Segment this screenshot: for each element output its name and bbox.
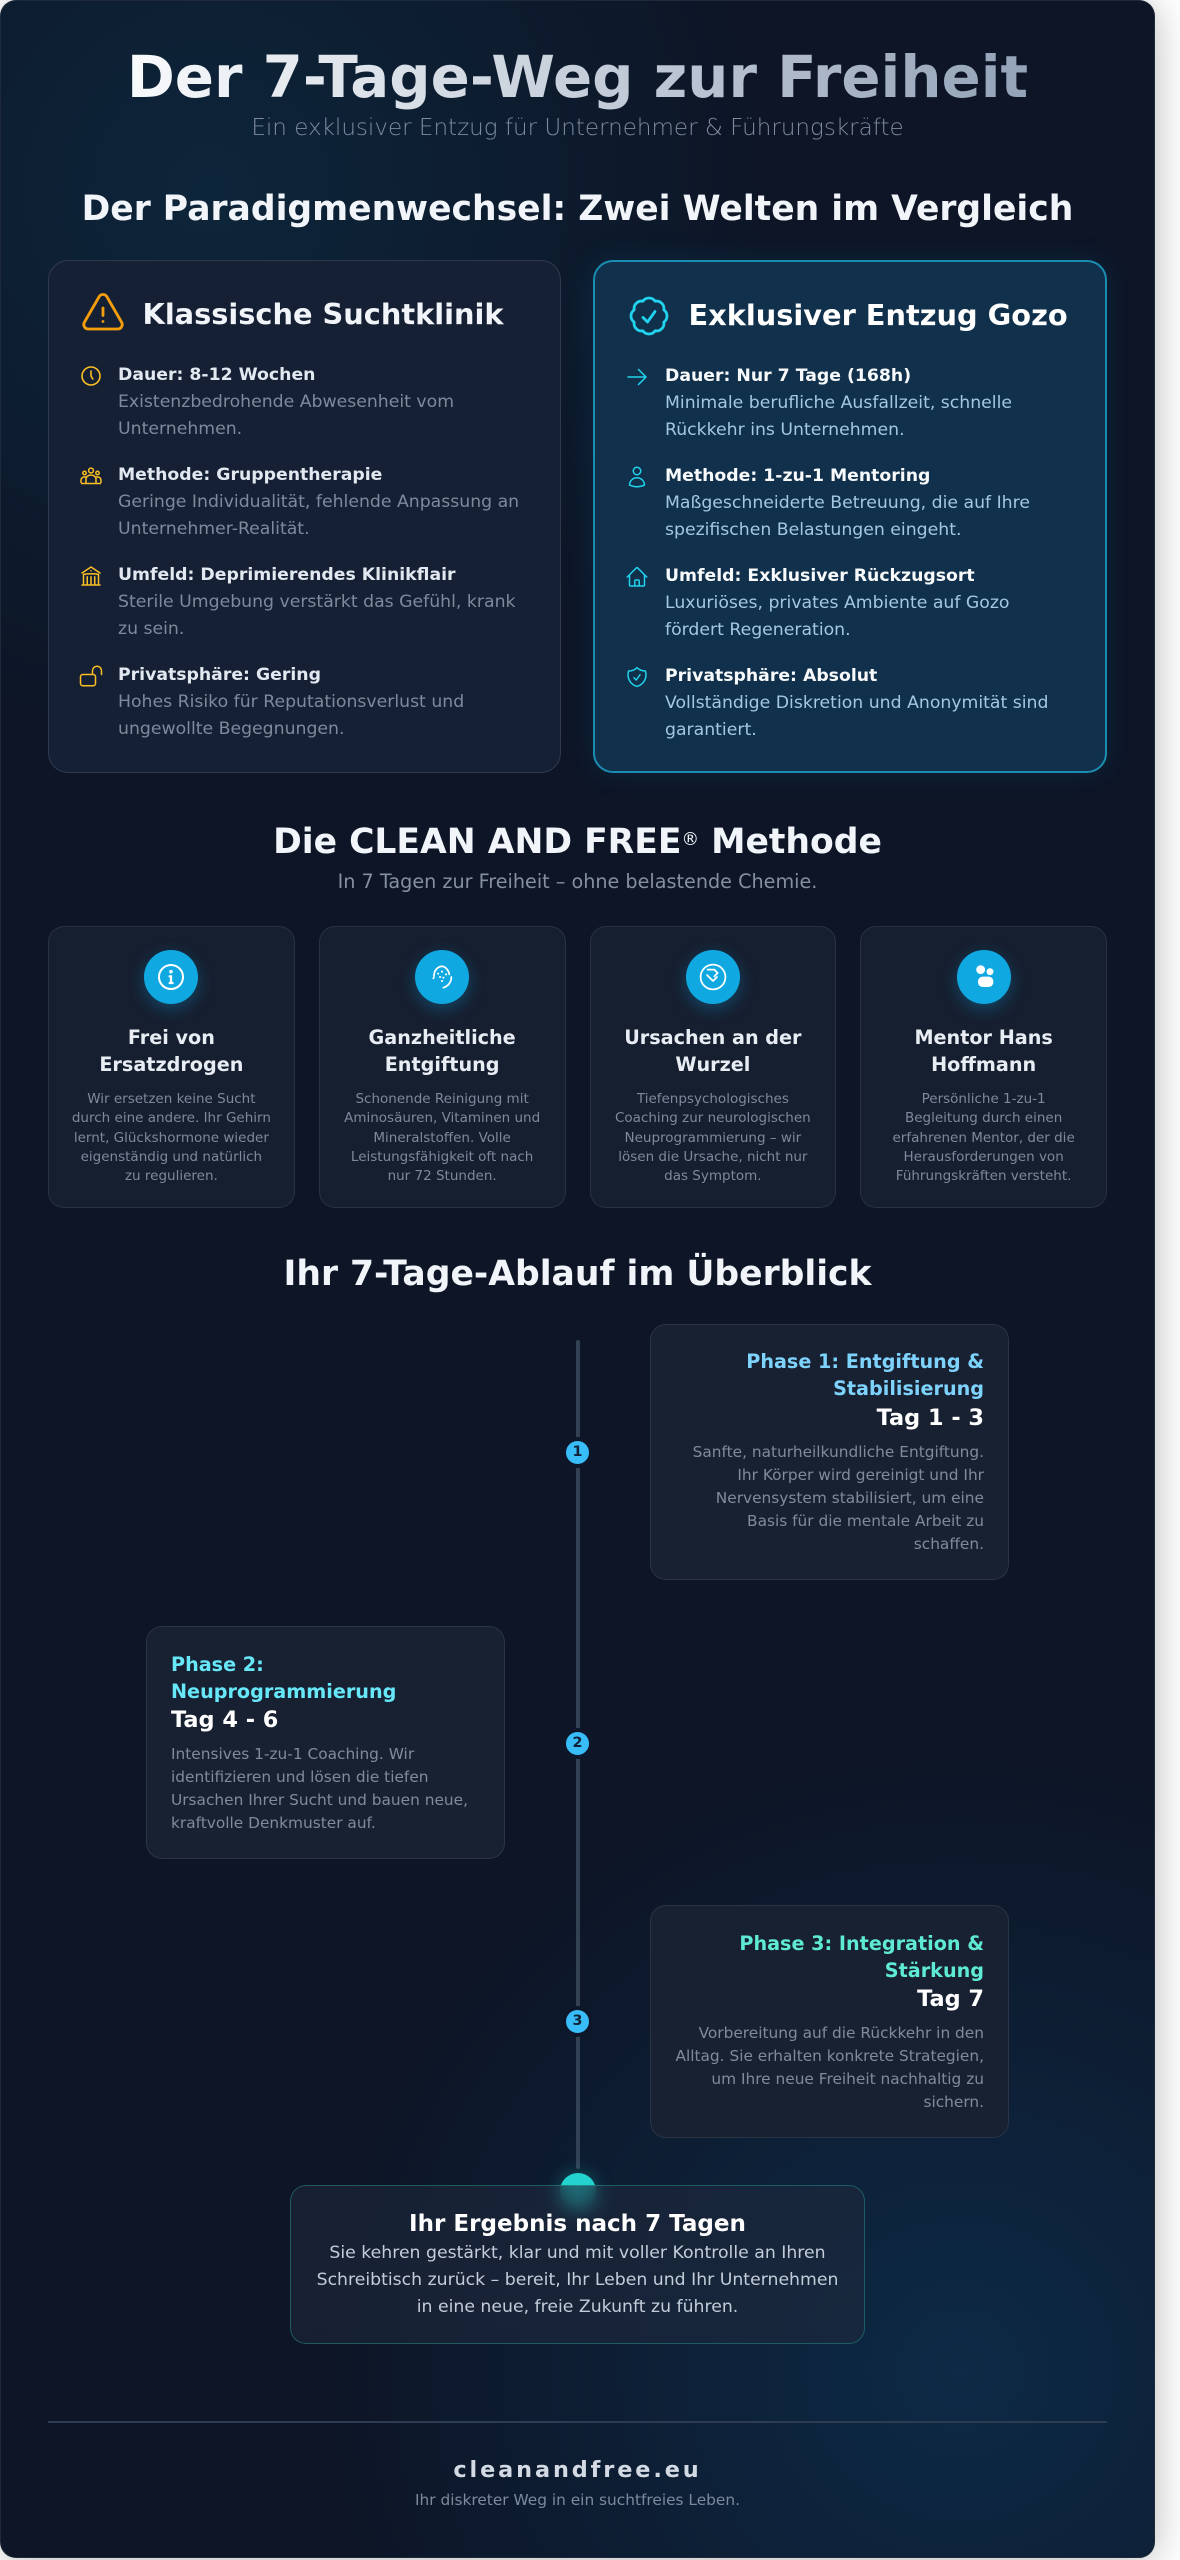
phase 2 text — [171, 1743, 468, 1835]
method text: Unternehmer-Realität. — [118, 519, 310, 539]
card: holistic detox — [319, 926, 566, 1208]
card text: Aminosäuren, Vitaminen und — [344, 1110, 540, 1126]
card title: Ursachen an der — [624, 1026, 802, 1049]
method text — [118, 465, 519, 539]
card text: eigenständig und natürlich — [81, 1149, 262, 1165]
icon: arrow in circle — [686, 950, 740, 1004]
timeline line with numbered dots — [566, 1340, 589, 2169]
dot 2: 2 — [572, 1734, 582, 1750]
item: method — [628, 466, 1030, 540]
card text: erfahrenen Mentor, der die — [892, 1130, 1075, 1146]
card text: lernt, Glückshormone wieder — [74, 1130, 269, 1146]
card text: durch eine andere. Ihr Gehirn — [72, 1110, 271, 1126]
method text — [665, 466, 1030, 540]
result circle — [560, 2173, 596, 2209]
icon: person — [628, 466, 646, 488]
duration text: Rückkehr ins Unternehmen. — [665, 420, 905, 440]
panel heading: Exklusiver Entzug Gozo — [688, 298, 1068, 332]
privacy text: Vollständige Diskretion und Anonymität sind — [665, 693, 1048, 713]
duration text: Dauer: Nur 7 Tage (168h) — [665, 366, 911, 386]
phase 3 label: Stärkung — [885, 1959, 984, 1982]
privacy text: Privatsphäre: Gering — [118, 665, 321, 685]
dot 1 — [562, 1436, 593, 1468]
card text: lösen die Ursache, nicht nur — [618, 1149, 808, 1165]
phase 1 text: Nervensystem stabilisiert, um eine — [716, 1489, 984, 1507]
subtitle: Ein exklusiver Entzug für Unternehmer & Führungskräfte — [251, 115, 904, 141]
result text: Schreibtisch zurück – bereit, Ihr Leben und Ihr Unternehmen — [317, 2270, 838, 2290]
card text — [892, 1091, 1075, 1184]
card title: Wurzel — [675, 1053, 750, 1076]
card title: Entgiftung — [385, 1053, 500, 1076]
title: Der 7-Tage-Weg zur Freiheit — [127, 43, 1028, 111]
phase 2 text: kraftvolle Denkmuster auf. — [171, 1814, 376, 1832]
privacy text: Privatsphäre: Absolut — [665, 666, 877, 686]
panel: classic clinic — [48, 260, 561, 773]
phase 2 text: Intensives 1-zu-1 Coaching. Wir — [171, 1745, 414, 1763]
phase 1 label — [746, 1350, 984, 1400]
phase 2 days: Tag 4 - 6 — [171, 1706, 278, 1732]
phase 3 text: um Ihre neue Freiheit nachhaltig zu — [711, 2070, 984, 2088]
dot 2 — [562, 1728, 593, 1758]
environment text: Umfeld: Exklusiver Rückzugsort — [665, 566, 975, 586]
phase 1 text: Basis für die mentale Arbeit zu — [747, 1512, 984, 1530]
dot 3 — [562, 2006, 593, 2036]
phase 1 text: Ihr Körper wird gereinigt und Ihr — [737, 1466, 984, 1484]
phase 3 days: Tag 7 — [917, 1986, 984, 2012]
card text: Schonende Reinigung mit — [355, 1091, 529, 1107]
card text: Wir ersetzen keine Sucht — [87, 1091, 256, 1107]
phase 1 text: schaffen. — [914, 1535, 984, 1553]
icon: open lock — [80, 666, 102, 686]
heading: timeline: Ihr 7-Tage-Ablauf im Überblick — [284, 1254, 872, 1294]
result box — [290, 2185, 865, 2344]
phase 2 label — [171, 1653, 396, 1703]
card text: Neuprogrammierung – wir — [625, 1130, 801, 1146]
heading: method: Die CLEAN AND FREE® Methode — [273, 822, 882, 862]
card text: zu regulieren. — [125, 1168, 218, 1184]
icon: house — [626, 566, 648, 587]
icon: arrow — [627, 368, 647, 386]
item: duration — [627, 366, 1012, 440]
card text: das Symptom. — [664, 1168, 762, 1184]
icon: people — [957, 950, 1011, 1004]
icon: shield — [627, 666, 647, 688]
duration text — [665, 366, 1012, 440]
environment text: fördert Regeneration. — [665, 620, 851, 640]
method text: Maßgeschneiderte Betreuung, die auf Ihre — [665, 493, 1030, 513]
card text: Persönliche 1-zu-1 — [922, 1091, 1046, 1107]
card title — [369, 1026, 516, 1076]
phase 3 text — [675, 2022, 984, 2114]
card: root causes — [590, 926, 836, 1208]
card title — [914, 1026, 1053, 1076]
privacy text: ungewollte Begegnungen. — [118, 719, 344, 739]
card title: Frei von — [128, 1026, 215, 1049]
privacy text — [118, 665, 464, 739]
card text: nur 72 Stunden. — [388, 1168, 497, 1184]
item: duration — [81, 365, 454, 439]
duration text — [118, 365, 454, 439]
card text — [72, 1091, 271, 1184]
icon: group — [80, 467, 102, 484]
item: privacy — [627, 666, 1048, 740]
card text: Mineralstoffen. Volle — [373, 1130, 511, 1146]
phase 2 text: identifizieren und lösen die tiefen — [171, 1768, 429, 1786]
phase 1 days: Tag 1 - 3 — [877, 1404, 984, 1430]
phase 1 card — [650, 1324, 1009, 1580]
vertical line — [576, 1340, 580, 2169]
phase 3 label — [739, 1930, 984, 1984]
phase 1 text — [693, 1443, 984, 1553]
result text: Sie kehren gestärkt, klar und mit voller Kontrolle an Ihren — [329, 2242, 826, 2262]
panel heading: Klassische Suchtklinik — [142, 297, 504, 331]
privacy text: garantiert. — [665, 720, 757, 740]
phase 3 text: Alltag. Sie erhalten konkrete Strategien, — [675, 2047, 984, 2065]
card text — [615, 1091, 811, 1184]
icon: warning triangle — [82, 293, 124, 330]
duration text: Dauer: 8-12 Wochen — [118, 365, 315, 385]
phase 2 text: Ursachen Ihrer Sucht und bauen neue, — [171, 1791, 468, 1809]
card text: Begleitung durch einen — [905, 1110, 1062, 1126]
privacy text — [665, 666, 1048, 740]
dot 1: 1 — [572, 1444, 582, 1460]
environment text: Umfeld: Deprimierendes Klinikflair — [118, 565, 456, 585]
duration text: Minimale berufliche Ausfallzeit, schnelle — [665, 393, 1012, 413]
card text: Tiefenpsychologisches — [637, 1091, 789, 1107]
card title: Ganzheitliche — [369, 1026, 516, 1049]
card text — [344, 1091, 540, 1184]
icon: check badge — [630, 296, 668, 336]
card title: Hoffmann — [931, 1053, 1036, 1076]
method text: spezifischen Belastungen eingeht. — [665, 520, 961, 540]
item: environment — [626, 566, 1010, 640]
card title: Mentor Hans — [914, 1026, 1053, 1049]
duration text: Unternehmen. — [118, 419, 242, 439]
card text: Herausforderungen von — [903, 1149, 1064, 1165]
phase 3 card — [650, 1905, 1009, 2138]
footer tagline: Ihr diskreter Weg in ein suchtfreies Leben. — [415, 2491, 740, 2509]
phase 2 label: Neuprogrammierung — [171, 1680, 396, 1703]
result text: in eine neue, freie Zukunft zu führen. — [417, 2296, 738, 2316]
card: free of substitutes — [48, 926, 295, 1208]
phase 2 label: Phase 2: — [171, 1653, 264, 1676]
card text: Führungskräften versteht. — [896, 1168, 1071, 1184]
duration text: Existenzbedrohende Abwesenheit vom — [118, 392, 454, 412]
item: privacy — [80, 665, 464, 739]
card: mentor — [860, 926, 1107, 1208]
dot 3: 3 — [572, 2012, 582, 2028]
icon: info — [144, 950, 198, 1004]
environment text — [665, 566, 1010, 640]
card title — [624, 1026, 802, 1076]
phase 1 label: Phase 1: Entgiftung & — [746, 1350, 984, 1373]
method text: Geringe Individualität, fehlende Anpassung an — [118, 492, 519, 512]
privacy text: Hohes Risiko für Reputationsverlust und — [118, 692, 464, 712]
phase 3 label: Phase 3: Integration & — [739, 1932, 984, 1955]
item: method — [80, 465, 519, 539]
footer brand: cleanandfree.eu — [453, 2457, 702, 2483]
method text: Methode: 1-zu-1 Mentoring — [665, 466, 930, 486]
environment text: zu sein. — [118, 619, 184, 639]
phase 3 text: sichern. — [923, 2093, 984, 2111]
item: environment — [81, 565, 516, 639]
panel: exclusive detox Gozo — [593, 260, 1107, 773]
card text: Coaching zur neurologischen — [615, 1110, 811, 1126]
icon: head — [415, 950, 469, 1004]
phase 2 card — [146, 1626, 505, 1859]
card title: Ersatzdrogen — [99, 1053, 243, 1076]
card text: Leistungsfähigkeit oft nach — [351, 1149, 533, 1165]
heading: paradigm shift: Der Paradigmenwechsel: Zwei Welten im Vergleich — [82, 189, 1073, 229]
phase 1 label: Stabilisierung — [833, 1377, 984, 1400]
environment text — [118, 565, 516, 639]
phase 1 text: Sanfte, naturheilkundliche Entgiftung. — [693, 1443, 984, 1461]
phase 3 text: Vorbereitung auf die Rückkehr in den — [699, 2024, 984, 2042]
environment text: Luxuriöses, privates Ambiente auf Gozo — [665, 593, 1010, 613]
icon: clinic building — [81, 566, 101, 586]
method subtitle: In 7 Tagen zur Freiheit – ohne belastende Chemie. — [338, 870, 817, 893]
method text: Methode: Gruppentherapie — [118, 465, 382, 485]
card title — [99, 1026, 243, 1076]
result title: Ihr Ergebnis nach 7 Tagen — [409, 2211, 746, 2237]
icon: clock — [81, 366, 101, 386]
result text — [291, 2240, 864, 2320]
environment text: Sterile Umgebung verstärkt das Gefühl, krank — [118, 592, 516, 612]
